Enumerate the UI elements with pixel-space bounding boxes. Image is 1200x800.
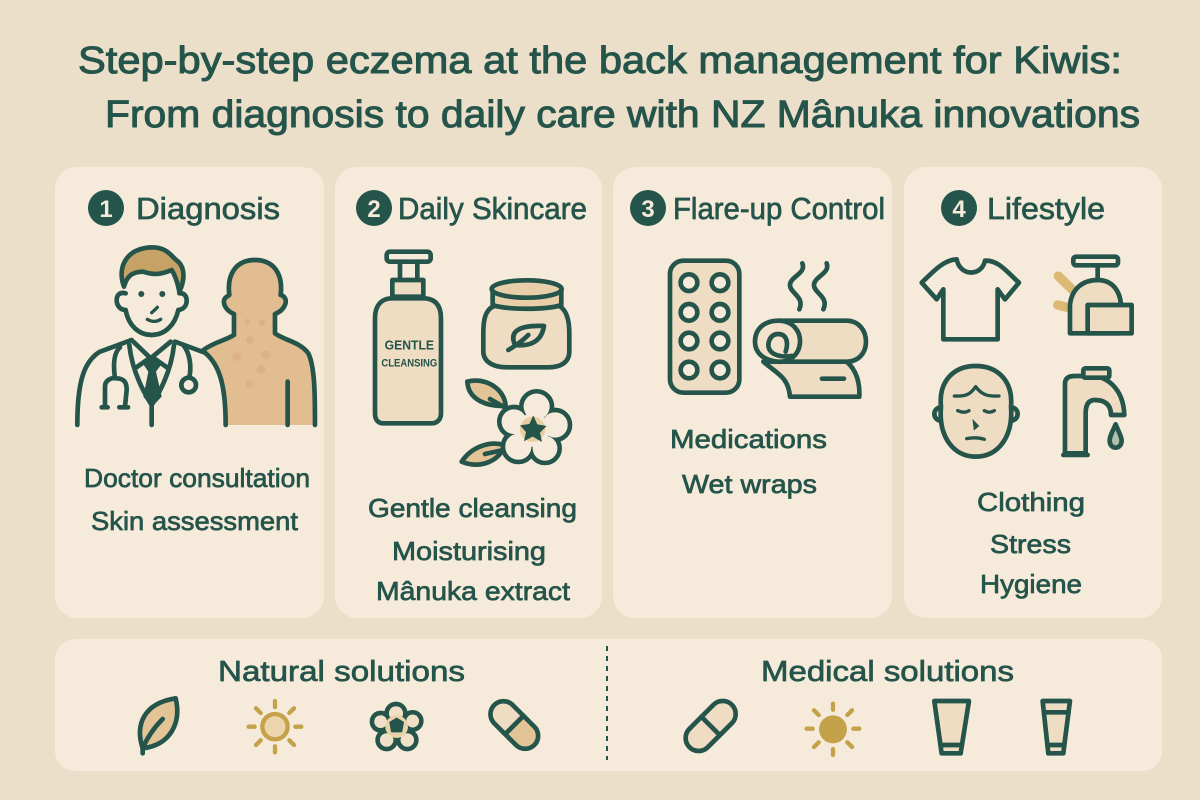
- heading: flare-up control: 3: [641, 196, 655, 223]
- heading: flare-up control: Flare-up Control: [673, 191, 885, 226]
- icon: soap pump and bar: [1058, 257, 1132, 333]
- text: lifestyle items: Clothing: [977, 487, 1085, 517]
- icon: pump bottle: [375, 252, 441, 423]
- icon: flower: [372, 704, 421, 749]
- heading: natural solutions: Natural solutions: [218, 656, 465, 688]
- heading: diagnosis: [88, 190, 280, 226]
- heading: diagnosis: Diagnosis: [136, 191, 280, 226]
- panel: lifestyle: [904, 167, 1162, 618]
- icon: sun outline: [249, 701, 301, 752]
- text: flare-up items: Medications: [670, 424, 827, 454]
- icon: blister pack: [670, 261, 739, 393]
- heading: diagnosis: 1: [99, 196, 113, 223]
- text: lifestyle items: [977, 487, 1085, 599]
- icon: sun solid: [807, 704, 859, 755]
- panel: solutions: [55, 639, 1162, 771]
- text: flare-up items: [670, 424, 827, 499]
- icon: wet wrap with steam: [755, 263, 866, 397]
- icon: doctor and patient: [77, 247, 315, 425]
- icon: leaf: [140, 698, 177, 753]
- icon: tap with water drop: [1063, 368, 1124, 455]
- heading: lifestyle: Lifestyle: [987, 191, 1105, 226]
- heading: lifestyle: [941, 190, 1105, 226]
- heading: daily skincare: Daily Skincare: [398, 191, 587, 226]
- icon: large tube: [934, 701, 969, 753]
- panel: diagnosis: [55, 167, 324, 618]
- heading: lifestyle: 4: [952, 196, 966, 223]
- title: [78, 40, 1140, 136]
- text: flare-up items: Wet wraps: [682, 469, 817, 499]
- icon: cream jar with leaf: [483, 280, 569, 367]
- icon: pump bottle: GENTLE: [385, 337, 434, 352]
- icon: t-shirt: [922, 259, 1019, 339]
- icon: stressed face: [934, 366, 1018, 457]
- icon: pump bottle: CLEANSING: [381, 358, 437, 370]
- heading: daily skincare: 2: [367, 196, 381, 223]
- panel: daily skincare: [335, 167, 602, 618]
- text: diagnosis items: Skin assessment: [91, 506, 299, 536]
- text: lifestyle items: Hygiene: [980, 569, 1082, 599]
- text: skincare items: Gentle cleansing: [368, 493, 577, 523]
- text: lifestyle items: Stress: [990, 529, 1071, 559]
- title: From diagnosis to daily care with NZ Mânuka innovations: [105, 94, 1140, 136]
- text: skincare items: Moisturising: [392, 536, 546, 566]
- icon: capsule medical: [680, 696, 741, 756]
- icon: manuka flower with leaves: [462, 381, 570, 465]
- text: skincare items: Mânuka extract: [376, 576, 571, 606]
- text: skincare items: [368, 493, 577, 606]
- icon: capsule natural: [485, 696, 544, 754]
- text: diagnosis items: [84, 463, 310, 536]
- icon: small tube: [1043, 701, 1070, 753]
- heading: medical solutions: Medical solutions: [761, 656, 1014, 688]
- title: Step-by-step eczema at the back management for Kiwis:: [78, 40, 1122, 82]
- panel: flare-up control: [613, 167, 892, 618]
- text: diagnosis items: Doctor consultation: [84, 463, 310, 493]
